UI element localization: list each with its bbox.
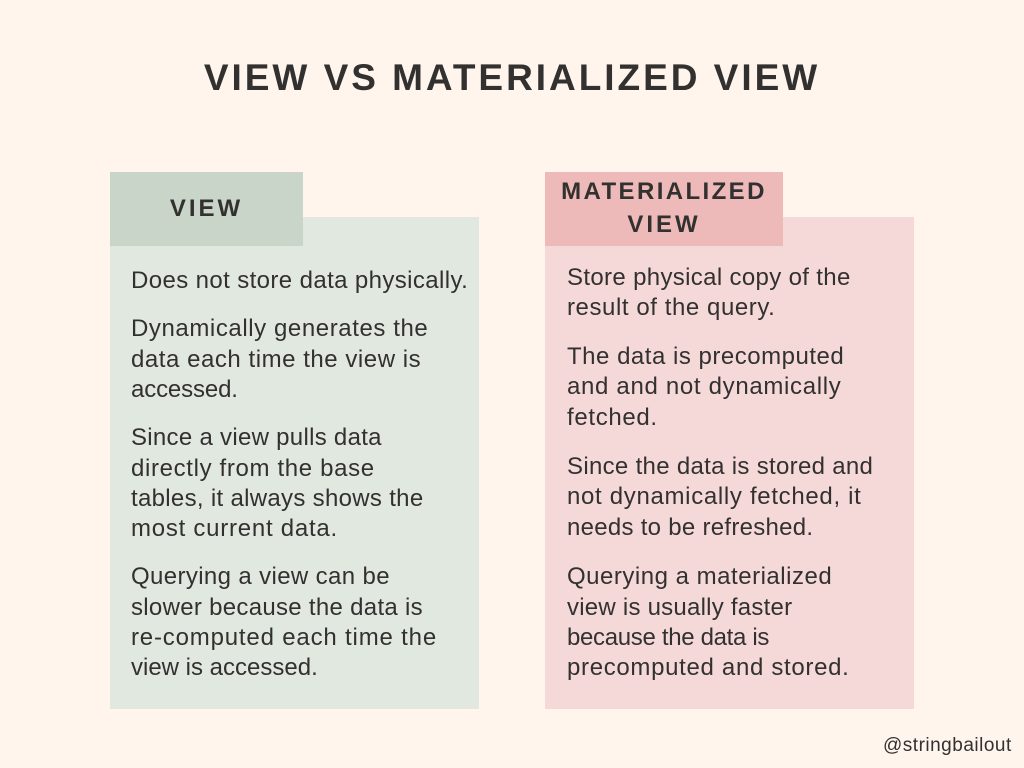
text block: materialized view points: result of the query. [567, 294, 775, 321]
panel: materialized view [545, 172, 914, 709]
heading tab: materialized view [545, 172, 783, 246]
text block: view points: accessed. [131, 376, 238, 403]
panel: view [110, 172, 479, 709]
heading: materialized view [561, 178, 767, 238]
text block: materialized view points: fetched. [567, 404, 658, 431]
text block: materialized view points: The data is precomputed [567, 343, 844, 370]
text block: materialized view points: view is usually faster [567, 594, 792, 621]
text block: view points: Does not store data physically. [131, 267, 468, 294]
text block: view points: view is accessed. [131, 654, 318, 681]
text block: view points [131, 267, 468, 681]
text block: view points: Dynamically generates the [131, 315, 428, 342]
text block: view points: Querying a view can be [131, 563, 390, 590]
text block: materialized view points: not dynamically fetched, it [567, 483, 862, 510]
text block: view points: Since a view pulls data [131, 424, 382, 451]
text block: materialized view points: Querying a materialized [567, 563, 832, 590]
text block: materialized view points: because the data is [567, 624, 769, 651]
heading: view: VIEW [170, 195, 243, 222]
text block: view points: re-computed each time the [131, 624, 437, 651]
title: VIEW VS MATERIALIZED VIEW [204, 57, 820, 98]
text block: materialized view points: Store physical copy of the [567, 264, 851, 291]
heading tab: view [110, 172, 303, 246]
text block: materialized view points: Since the data is stored and [567, 453, 873, 480]
text block: view points: tables, it always shows the [131, 485, 424, 512]
text block: materialized view points: and and not dynamically [567, 373, 841, 400]
text block: view points: directly from the base [131, 455, 375, 482]
heading: materialized view: MATERIALIZED [561, 178, 767, 205]
text block: view points: slower because the data is [131, 594, 423, 621]
text block: materialized view points: precomputed and stored. [567, 654, 849, 681]
panel background: view [110, 217, 479, 709]
text block: materialized view points: needs to be refreshed. [567, 514, 813, 541]
panel background: materialized view [545, 217, 914, 709]
text block: view points: data each time the view is [131, 346, 421, 373]
text block: materialized view points [567, 264, 873, 681]
heading: materialized view: VIEW [627, 211, 701, 238]
credit handle: @stringbailout [883, 735, 1012, 756]
text block: view points: most current data. [131, 515, 338, 542]
